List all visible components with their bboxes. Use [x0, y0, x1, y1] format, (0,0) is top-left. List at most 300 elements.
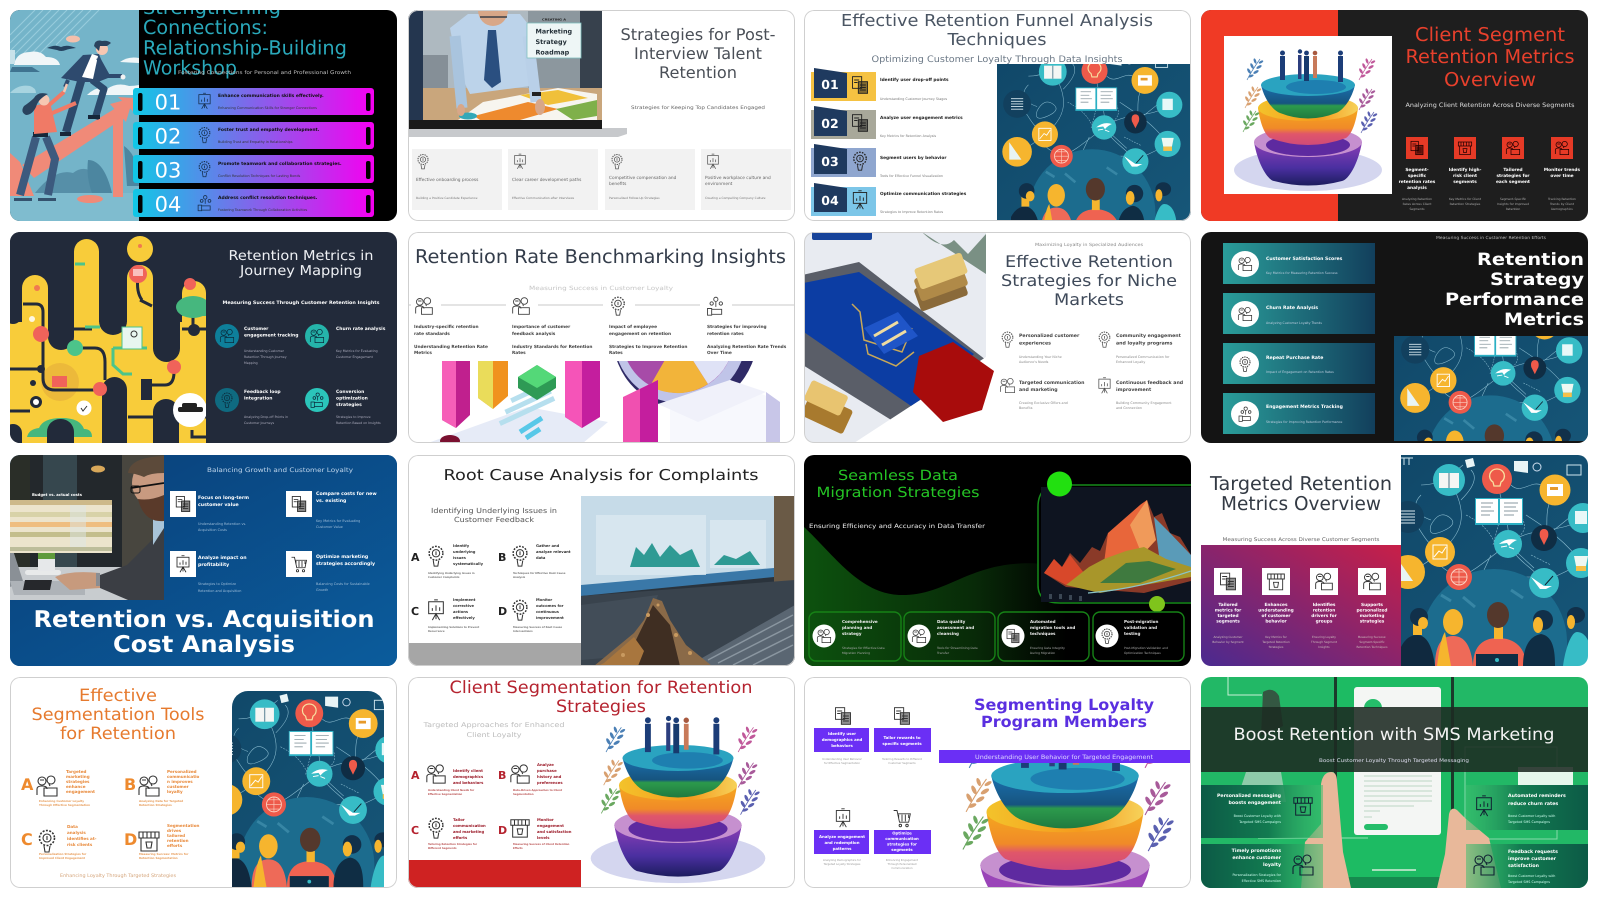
approach A: A — [411, 769, 420, 782]
cause A: systematically — [453, 562, 484, 566]
panel: Targeted retention metrics overview slide — [1201, 455, 1588, 666]
metric: feedback loop: Customer Journeys — [244, 421, 275, 425]
feature: feedback requests: Feedback requests — [1508, 849, 1558, 855]
tool C: identifies at- — [67, 836, 97, 841]
subtitle: Measuring Success Through Customer Retention Insights — [222, 300, 380, 306]
item 04: 04 — [155, 192, 181, 216]
tool B: Retention Strategies — [139, 803, 172, 807]
metric: churn rate: Key Metrics for Evaluating — [336, 349, 378, 353]
cause B: B — [498, 551, 506, 564]
step 4: validation and — [1124, 625, 1157, 630]
title — [1001, 252, 1177, 309]
framed mountain data chart — [1038, 485, 1191, 603]
metric: feedback loop: Feedback loop — [244, 389, 281, 395]
illustration: climbing people on arrow — [10, 10, 139, 221]
title: Strategies — [556, 697, 646, 717]
tool D: Measuring Success: Metrics for — [139, 852, 189, 856]
metric 4: strategies — [1360, 618, 1385, 624]
strategy 3: Creating Exclusive Offers and — [1019, 401, 1068, 405]
title: Journey Mapping — [239, 263, 362, 279]
step 01: Identify user drop-off points — [880, 77, 949, 83]
item: profitability impact: profitability — [198, 562, 229, 568]
metric 3: Identifies — [1313, 602, 1336, 608]
step 04: Optimize communication strategies — [880, 191, 967, 197]
photo: analyst with laptop and budget table — [10, 455, 168, 600]
cause B — [498, 544, 571, 579]
panel: Retention strategies for niche markets slide — [804, 232, 1191, 443]
item: optimize marketing: Growth — [316, 588, 328, 592]
network illustration — [1394, 336, 1588, 441]
metric 3: strategies for — [1496, 173, 1530, 179]
metric: feedback loop: integration — [244, 396, 272, 402]
step 3: Automated — [1030, 619, 1056, 624]
segment 3: and redemption — [824, 840, 860, 845]
item: compare costs: vs. existing — [316, 498, 346, 504]
panel: Retention funnel analysis slide — [804, 10, 1191, 221]
sign: marketing strategy roadmap: Strategy — [536, 38, 568, 46]
supertitle: Measuring Success in Customer Retention Efforts — [1436, 235, 1546, 240]
panel: Retention rate benchmarking slide — [408, 232, 795, 443]
cause A — [411, 544, 484, 579]
funnel illustration — [591, 716, 765, 883]
tool B: Personalized — [167, 769, 197, 774]
step 04: Strategies to Improve Retention Rates — [880, 210, 943, 214]
card 1: Effective onboarding process — [416, 177, 479, 183]
strategy 1 — [1002, 332, 1080, 364]
metric 2: behavior — [1265, 618, 1288, 624]
green node bottom — [1149, 596, 1165, 612]
dark title band — [1201, 707, 1588, 772]
metric 3: Through Segment — [1310, 640, 1338, 644]
feature: automated reminders — [1466, 785, 1588, 830]
subtitle: Targeted Approaches for Enhanced — [422, 721, 564, 729]
segment 2 — [874, 708, 931, 765]
metric 4: Trends by Client — [1549, 202, 1575, 206]
card 4: environment — [705, 181, 733, 187]
metric 2: segments — [1453, 179, 1477, 185]
title: Interview Talent — [634, 44, 762, 63]
step 2: Transfer — [936, 651, 950, 655]
approach C: Tailor — [453, 817, 465, 822]
subtitle: Boost Customer Loyalty Through Targeted Messaging — [1319, 758, 1469, 764]
metric 3 — [1496, 137, 1530, 211]
sign: marketing strategy roadmap: Roadmap — [536, 48, 570, 56]
approach B: Data-Driven Approaches to Client — [513, 789, 563, 792]
title — [816, 468, 980, 501]
item: compare costs: Compare costs for new — [316, 491, 377, 497]
tool D: drives — [167, 828, 182, 833]
metric: conversion optimization: Retention Based on Insights — [336, 421, 381, 425]
panel: Segmentation tools slide — [10, 677, 397, 888]
metric: engagement tracking: Understanding Customer — [244, 349, 285, 353]
metric 2: Enhances — [1264, 602, 1288, 608]
title: Retention Metrics in — [228, 248, 374, 264]
tool C: Personalization Strategies for — [39, 852, 87, 856]
title — [450, 678, 752, 717]
step 1: Comprehensive — [842, 619, 878, 624]
strategy 2: Community engagement — [1116, 333, 1182, 339]
title: Seamless Data — [838, 468, 958, 484]
strategy 4: Building Community Engagement — [1116, 401, 1172, 405]
metric card 2: Analyzing Customer Loyalty Trends — [1266, 321, 1322, 325]
metric card 3: Repeat Purchase Rate — [1266, 355, 1323, 361]
item: profitability impact: Analyze impact on — [198, 555, 247, 561]
item 02: Foster trust and empathy development. — [218, 127, 320, 133]
red hexagon — [913, 342, 994, 422]
network illustration — [232, 691, 384, 887]
green node top — [1047, 472, 1072, 496]
segment 4: Enhancing Engagement — [886, 858, 918, 862]
item: optimize marketing: Optimize marketing — [316, 554, 368, 560]
tool A: strategies — [66, 779, 90, 784]
approach D: Efforts — [513, 847, 523, 850]
metric: conversion optimization: optimization — [336, 396, 368, 402]
subtitle: Identifying Underlying Issues in — [431, 507, 557, 515]
metric 4: marketing — [1360, 613, 1384, 619]
benchmark 4 — [707, 297, 787, 356]
subtitle: Analyzing Client Retention Across Diverse Segments — [1406, 102, 1574, 109]
benchmark 3: Impact of employee — [609, 324, 657, 330]
approach A — [411, 765, 484, 796]
title: Migration Strategies — [816, 485, 980, 501]
step 01: 01 — [821, 77, 839, 92]
item: optimize marketing: Balancing Costs for Sustainable — [316, 582, 370, 586]
card 2: Clear career development paths — [512, 177, 582, 183]
strategy 2 — [1099, 332, 1182, 364]
step 3 — [998, 612, 1089, 661]
benchmark 4: Over Time — [707, 350, 732, 356]
subtitle — [431, 507, 557, 524]
cause A: underlying — [453, 550, 476, 554]
metric 2: Strategies — [1269, 645, 1284, 649]
step 1: Migration Planning — [842, 651, 870, 655]
benchmark 3: engagement on retention — [609, 331, 671, 337]
cause D: Interventions — [513, 630, 533, 633]
segment 1: Understanding User Behavior — [822, 757, 863, 761]
metric: conversion optimization: strategies — [336, 402, 362, 408]
segment 4: segments — [891, 847, 913, 852]
tool B: B — [124, 775, 136, 794]
strategy 3: Benefits — [1019, 406, 1033, 410]
benchmark 3: Rates — [609, 350, 623, 356]
item: profitability impact: Retention and Acquisition — [198, 589, 241, 593]
approach A: Understanding Client Needs for — [428, 789, 475, 792]
subtitle: Measuring Success Across Diverse Customer Segments — [1222, 537, 1380, 543]
card 1 — [412, 149, 502, 210]
table caption: Budget vs. actual costs — [32, 492, 83, 497]
cause B: Techniques for Effective Root Cause — [513, 572, 566, 575]
strategy 2: Enhanced Loyalty — [1116, 360, 1145, 364]
cause C: C — [411, 605, 419, 618]
strategy 3: Targeted communication — [1019, 380, 1084, 386]
title — [34, 607, 374, 658]
metric: conversion optimization — [305, 388, 381, 425]
segment 1: for Effective Segmentation — [824, 761, 860, 765]
strategy 3: and marketing — [1019, 387, 1058, 393]
tool A: enhance — [66, 784, 86, 789]
metric: engagement tracking — [215, 324, 298, 365]
feature: timely promotions: Effective SMS Retention — [1242, 879, 1281, 883]
cause B: Gather and — [536, 544, 560, 548]
tool B: loyalty — [167, 789, 183, 794]
approach D: engagement — [537, 823, 564, 828]
approach B: B — [498, 769, 506, 782]
metric card 1: Customer Satisfaction Scores — [1266, 256, 1343, 262]
benchmark 1 — [414, 298, 488, 356]
cause A: issues — [453, 556, 467, 560]
tool B: Analyzing Data for Targeted — [139, 799, 183, 803]
title: Performance — [1445, 290, 1584, 310]
step 04: 04 — [821, 193, 839, 208]
title — [1445, 250, 1584, 330]
step 3: migration tools and — [1030, 625, 1075, 630]
metric: conversion optimization: Strategies to Improve — [336, 415, 371, 419]
tool C: risk clients — [67, 842, 93, 847]
step 2: Tools for Streamlining Data — [936, 646, 978, 650]
metric 1: Tailored — [1218, 602, 1238, 608]
metric 1: Analyzing Retention — [1402, 197, 1432, 201]
tool A: A — [21, 775, 34, 794]
segment 1: Identify user — [828, 731, 856, 736]
metric 4 — [1544, 137, 1581, 211]
metric 3: Insights for Improved — [1497, 202, 1529, 206]
strategy 4: improvement — [1116, 387, 1152, 393]
card 3: Competitive compensation and — [609, 175, 677, 181]
gray footer band — [408, 643, 581, 666]
item: compare costs — [286, 491, 377, 529]
cause B: analyze relevant — [536, 550, 571, 554]
approach C: and marketing — [453, 829, 485, 834]
metric 4: Demographics — [1551, 207, 1573, 211]
approach D: and satisfaction — [537, 829, 572, 834]
metric 4: personalized — [1356, 608, 1388, 614]
strategy 2: and loyalty programs — [1116, 340, 1173, 346]
metric 3: Insights — [1318, 645, 1330, 649]
benchmark 3: Strategies to Improve Retention — [609, 344, 687, 350]
segment 2: Tailoring Rewards to Different — [881, 757, 922, 761]
photo: phone with shopping cart and gold cards — [798, 226, 994, 443]
sign: marketing strategy roadmap: Marketing — [536, 28, 573, 36]
feature: feedback requests: Targeted SMS Campaigns — [1507, 880, 1550, 884]
title: Program Members — [981, 713, 1147, 731]
feature: feedback requests — [1466, 844, 1588, 888]
title: Root Cause Analysis for Complaints — [444, 466, 759, 484]
metric card 3 — [1223, 343, 1375, 384]
segment 2: specific segments — [882, 741, 922, 746]
red footer band — [408, 860, 581, 888]
feature: personalized messaging: Personalized messaging — [1217, 793, 1281, 799]
approach C: efforts — [453, 835, 468, 840]
step 02: Key Metrics for Retention Analysis — [880, 134, 936, 138]
title: Retention vs. Acquisition — [34, 607, 374, 633]
feature: personalized messaging: Targeted SMS Campaigns — [1238, 820, 1281, 824]
metric card 1: Key Metrics for Measuring Retention Success — [1266, 271, 1338, 275]
segment 2: Tailor rewards to — [883, 735, 921, 740]
segment 4: communication — [885, 836, 919, 841]
metric 4: Tracking Retention — [1547, 197, 1576, 201]
feature: timely promotions: Personalization Strategies for — [1233, 873, 1282, 877]
metric 1: analysis — [1407, 185, 1427, 191]
card 2 — [508, 149, 598, 210]
tool A: Through Effective Segmentation — [39, 803, 90, 807]
item 02 — [133, 122, 374, 149]
approach B: preferences — [537, 780, 563, 785]
item: long-term value: customer value — [198, 502, 239, 508]
cause B: Analysis — [513, 576, 526, 579]
approach C — [411, 817, 486, 850]
metric 4: Supports — [1361, 602, 1383, 608]
cause C: actions — [453, 610, 469, 614]
metric 3: groups — [1316, 620, 1333, 624]
benchmark 2 — [512, 298, 592, 356]
title: Cost Analysis — [113, 632, 295, 658]
metric: engagement tracking: engagement tracking — [244, 332, 298, 338]
item 04 — [133, 189, 374, 217]
cause D: D — [498, 605, 507, 618]
metric: feedback loop: Analyzing Drop-off Points in — [244, 415, 288, 419]
network illustration — [997, 64, 1191, 221]
title: Strategies for Post- — [620, 25, 776, 44]
benchmark 2: Industry Standards for Retention — [512, 344, 592, 350]
tool D: D — [124, 830, 137, 849]
tool B: communicatio — [167, 774, 200, 779]
title: Techniques — [946, 30, 1046, 49]
metric: churn rate: Customer Engagement — [336, 355, 374, 359]
step 4: Optimization Techniques — [1124, 651, 1161, 655]
gradient band — [1201, 545, 1401, 666]
subtitle: Measuring Success in Customer Loyalty — [529, 285, 674, 292]
cause D: Monitor — [536, 598, 552, 602]
metric 3: Segment-Specific — [1500, 197, 1526, 201]
item: profitability impact: Strategies to Optimize — [198, 582, 236, 586]
tool C: Improved Client Engagement — [39, 856, 86, 860]
approach D: Measuring Success of Client Retention — [513, 843, 570, 846]
panel: Client segmentation strategies slide — [408, 677, 795, 888]
segment 4: Through Personalized — [887, 862, 917, 866]
metric 3: each segment — [1496, 179, 1530, 185]
panel: Strengthening Connections workshop slide — [10, 10, 397, 221]
step 2: assessment and — [937, 625, 974, 630]
title — [974, 696, 1154, 731]
strategy 4: Continuous feedback and — [1116, 380, 1183, 386]
panel: SMS marketing retention slide — [1201, 677, 1588, 888]
strategy 1: Personalized customer — [1019, 333, 1080, 339]
title: Boost Retention with SMS Marketing — [1234, 725, 1554, 745]
isometric chart illustration — [431, 361, 780, 442]
footer tagline: Enhancing Loyalty Through Targeted Strategies — [60, 873, 176, 879]
cause D: continuous — [536, 610, 560, 614]
card 3: benefits — [609, 181, 627, 187]
card 2: Effective Communication after Interviews — [512, 196, 575, 200]
step 2 — [904, 612, 995, 661]
approach A: demographics — [453, 774, 484, 779]
metric 2: of customer — [1262, 613, 1291, 619]
strategy 1: experiences — [1019, 340, 1051, 346]
approach C: communication — [453, 823, 486, 828]
metric 4: Monitor trends — [1544, 167, 1581, 173]
item: compare costs: Key Metrics for Evaluating — [316, 519, 360, 523]
segment 1 — [814, 708, 869, 765]
segment 4: Optimize — [892, 830, 912, 836]
metric: engagement tracking: Customer — [244, 326, 269, 332]
item 01 — [133, 88, 374, 115]
benchmark 1: Understanding Retention Rate — [414, 344, 488, 350]
metric: feedback loop — [215, 388, 288, 425]
step 3: Ensuring Data Integrity — [1030, 646, 1065, 650]
step 1 — [809, 612, 901, 661]
title: Metrics Overview — [1221, 493, 1381, 515]
metric card 2 — [1223, 293, 1375, 334]
approach A: Effective Segmentation — [428, 793, 462, 796]
metric 2: Key Metrics for — [1265, 635, 1288, 639]
title: Effective — [79, 686, 157, 706]
metric 1: Analyzing Customer — [1213, 635, 1243, 639]
metric 1: Segment- — [1405, 167, 1429, 173]
step 3: techniques — [1030, 631, 1056, 636]
metric 1: Segments — [1409, 207, 1425, 211]
metric 1 — [1212, 568, 1244, 644]
approach B: Segmentation — [513, 793, 534, 796]
approach D: Monitor — [537, 817, 554, 822]
metric 2: understanding — [1258, 608, 1294, 614]
step 03: Segment users by behavior — [880, 155, 947, 161]
panel: Retention strategy performance metrics slide — [1201, 232, 1588, 443]
tool A: Enhancing Customer Loyalty — [39, 799, 84, 803]
panel: Client segment retention metrics slide — [1201, 10, 1588, 221]
subtitle: Fostering Connections for Personal and Professional Growth — [178, 70, 351, 76]
panel: Segmenting loyalty program members slide — [804, 677, 1191, 888]
tool B: customer — [167, 784, 189, 789]
benchmark 4: Analyzing Retention Rate Trends — [707, 344, 787, 350]
title: Effective Retention Funnel Analysis — [841, 11, 1153, 30]
strategy 2: Personalized Communication for — [1116, 355, 1170, 359]
segment 1: demographics and — [822, 737, 862, 742]
feature: personalized messaging: Boost Customer Loyalty with — [1234, 814, 1281, 818]
metric: engagement tracking: Retention Through Journey — [244, 355, 287, 359]
photo: man at laptop with roadmap — [408, 0, 627, 137]
benchmark 4: retention rates — [707, 331, 744, 337]
step 4: Post-migration — [1124, 619, 1158, 624]
title — [1209, 473, 1392, 515]
tool C: C — [21, 830, 33, 849]
step 4: testing — [1124, 631, 1140, 636]
approach D: levels — [537, 835, 550, 840]
metric: engagement tracking: Mapping — [244, 361, 258, 365]
cause B: data — [536, 556, 546, 560]
metric: churn rate — [305, 324, 386, 359]
step 3: During Migration — [1030, 651, 1055, 655]
panel: Root cause analysis slide — [408, 455, 795, 666]
metric 4: Retention Techniques — [1357, 645, 1388, 649]
item: long-term value: Focus on long-term — [198, 495, 249, 501]
tool B: n improves — [167, 779, 193, 784]
title — [620, 25, 776, 82]
step 2: Data quality — [937, 619, 966, 624]
card 1: Building a Positive Candidate Experience — [416, 196, 478, 200]
metric 4: Measuring Success: — [1358, 635, 1386, 639]
network illustration — [1401, 455, 1588, 666]
title: Segmenting Loyalty — [974, 696, 1154, 714]
metric card 4 — [1223, 393, 1375, 434]
title — [143, 0, 347, 80]
metric 3: Ensuring Loyalty — [1312, 635, 1336, 639]
item 03: Conflict Resolution Techniques for Lasting Bonds — [218, 174, 300, 178]
title: Strategies for Niche — [1001, 271, 1177, 290]
feature: feedback requests: improve customer — [1508, 856, 1557, 862]
item 01: 01 — [155, 90, 181, 114]
approach B: history and — [537, 774, 562, 779]
segment 3: Targeted Loyalty Strategies — [823, 862, 861, 866]
